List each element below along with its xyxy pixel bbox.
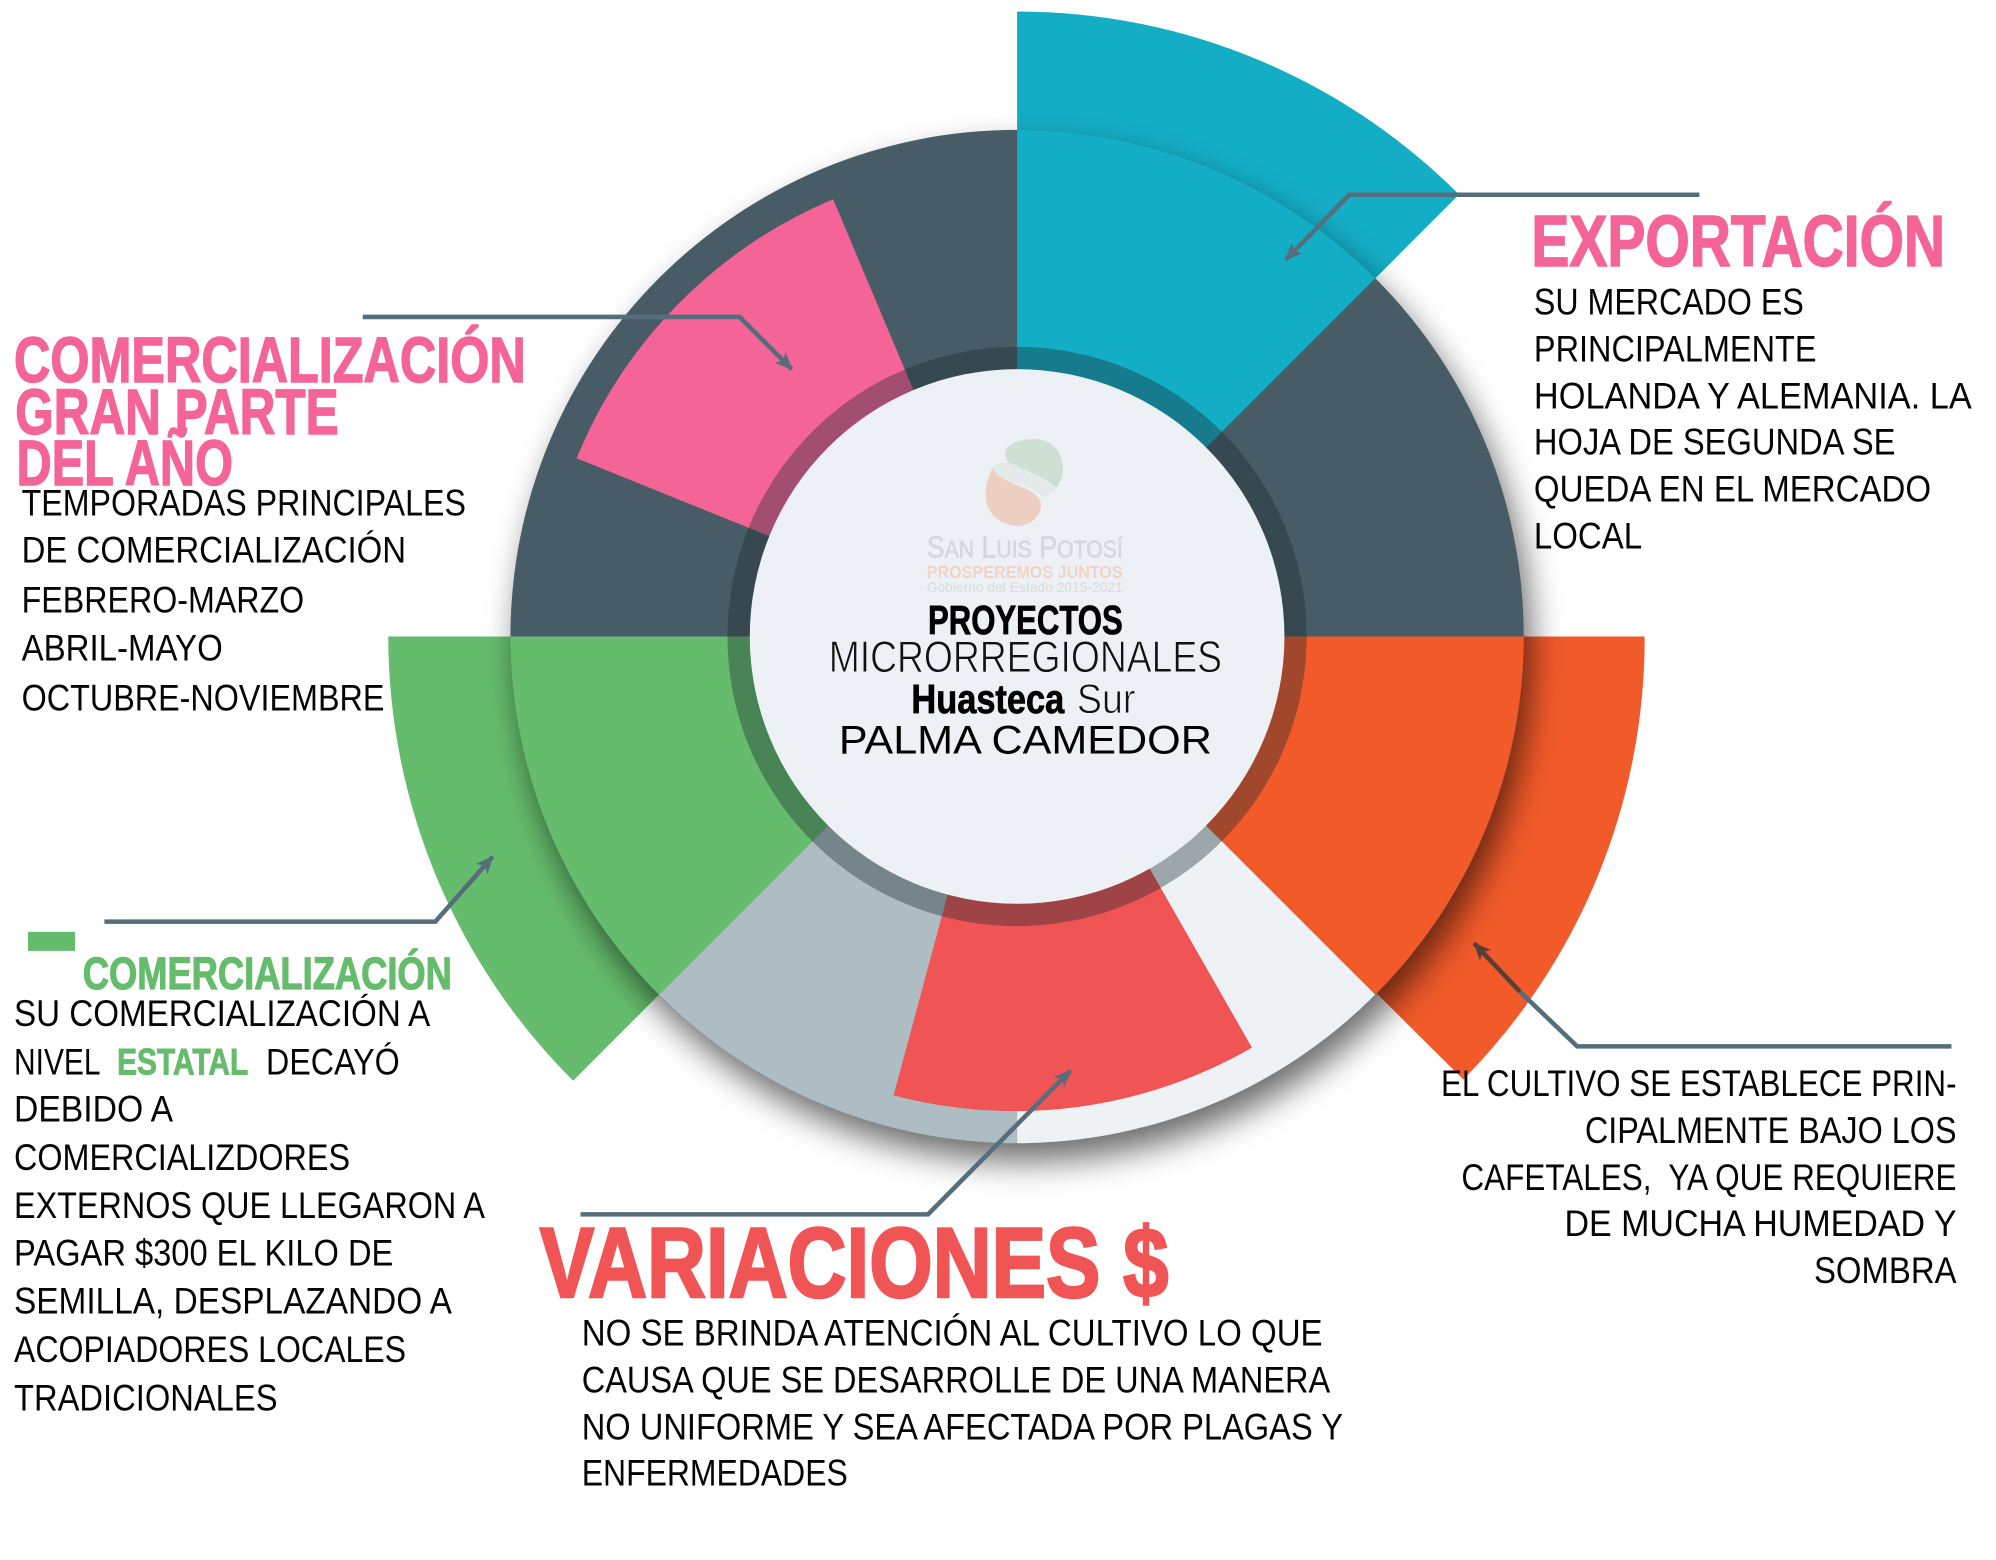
centre title: Sur	[1077, 675, 1135, 722]
text: exportación: LOCAL	[1534, 516, 1642, 557]
teal inner sector	[1017, 130, 1375, 636]
text: comercialización estatal	[14, 993, 485, 1418]
arrow: variaciones	[580, 1071, 1071, 1214]
text: exportación: QUEDA EN EL MERCADO	[1534, 469, 1931, 510]
centre title: PALMA CAMEDOR	[839, 719, 1212, 763]
text: comercialización estatal: TRADICIONALES	[14, 1377, 278, 1418]
text: exportación: SU MERCADO ES	[1534, 281, 1804, 322]
text: cultivo: SOMBRA	[1814, 1250, 1957, 1291]
logo: San Luis Potosí	[927, 439, 1123, 595]
text: temporadas: ABRIL-MAYO	[22, 628, 223, 669]
text: comercialización estatal: NIVEL	[14, 1041, 101, 1082]
heading: variaciones: VARIACIONES $	[540, 1208, 1169, 1319]
text: comercialización estatal: SEMILLA, DESPLAZANDO A	[14, 1281, 452, 1322]
text: temporadas: TEMPORADAS PRINCIPALES	[22, 483, 466, 524]
text: comercialización estatal: ACOPIADORES LOCALES	[14, 1329, 406, 1370]
dark ring	[727, 347, 1307, 926]
red sector	[894, 636, 1252, 1111]
text: temporadas: OCTUBRE-NOVIEMBRE	[22, 677, 384, 718]
arrow: cultivo	[1474, 943, 1951, 1046]
arrow: exportación	[1286, 195, 1699, 260]
text: comercialización estatal: DECAYÓ	[266, 1041, 400, 1082]
heading: comercialización gran parte del año: GRAN PARTE	[15, 377, 339, 448]
text: comercialización estatal: ESTATAL	[117, 1041, 248, 1082]
text: variaciones: ENFERMEDADES	[582, 1453, 848, 1494]
text: variaciones: NO UNIFORME Y SEA AFECTADA POR PLAGAS Y	[582, 1407, 1343, 1448]
green inner sector	[510, 636, 1017, 995]
heading: comercialización gran parte del año: DEL AÑO	[17, 428, 233, 499]
text: exportación: PRINCIPALMENTE	[1534, 329, 1817, 370]
centre title	[829, 597, 1222, 763]
text: temporadas	[22, 483, 466, 718]
green outer sector	[388, 636, 1017, 1081]
logo mark	[986, 439, 1063, 526]
heading: comercialización: COMERCIALIZACIÓN	[83, 947, 452, 999]
text: comercialización estatal: COMERCIALIZDORES	[14, 1137, 350, 1178]
text: cultivo	[1441, 1063, 1957, 1291]
text: variaciones: CAUSA QUE SE DESARROLLE DE UNA MANERA	[582, 1360, 1331, 1401]
text: temporadas: FEBRERO-MARZO	[22, 579, 304, 620]
centre title: PROYECTOS	[928, 597, 1123, 643]
text: comercialización estatal: EXTERNOS QUE LLEGARON A	[14, 1185, 485, 1226]
centre title: MICRORREGIONALES	[829, 633, 1222, 682]
text: variaciones: NO SE BRINDA ATENCIÓN AL CULTIVO LO QUE	[582, 1313, 1323, 1354]
icon: green bar	[28, 932, 75, 951]
donut chart	[388, 11, 1645, 1143]
text: exportación	[1534, 281, 1972, 557]
base circle	[510, 130, 1524, 1143]
text: exportación: HOLANDA Y ALEMANIA. LA	[1534, 376, 1972, 417]
arrow: comercialización gran parte del año	[363, 317, 792, 369]
heading: comercialización gran parte del año	[14, 325, 526, 499]
pink sector	[577, 199, 1017, 636]
logo: San Luis Potosí: Gobierno del Estado 2015-2021	[927, 579, 1123, 595]
heading: comercialización gran parte del año: COMERCIALIZACIÓN	[14, 325, 526, 396]
text: comercialización estatal: SU COMERCIALIZACIÓN A	[14, 993, 431, 1034]
text: cultivo: CIPALMENTE BAJO LOS	[1585, 1110, 1957, 1151]
text: comercialización estatal: PAGAR $300 EL KILO DE	[14, 1232, 393, 1273]
orange inner sector	[1017, 636, 1524, 995]
centre circle	[750, 369, 1284, 904]
text: cultivo: DE MUCHA HUMEDAD Y	[1564, 1203, 1957, 1244]
text: temporadas: DE COMERCIALIZACIÓN	[22, 530, 406, 571]
arrow: comercialización estatal	[104, 857, 493, 922]
logo: San Luis Potosí: PROSPEREMOS JUNTOS	[927, 562, 1123, 582]
text: variaciones	[582, 1313, 1343, 1494]
logo text: SAN LUIS POTOSÍ	[927, 531, 1123, 565]
orange outer sector	[1017, 636, 1645, 1079]
text: comercialización estatal: DEBIDO A	[14, 1088, 173, 1129]
text: exportación: HOJA DE SEGUNDA SE	[1534, 421, 1895, 462]
teal outer sector	[1017, 11, 1459, 636]
centre title: Huasteca	[911, 676, 1064, 722]
